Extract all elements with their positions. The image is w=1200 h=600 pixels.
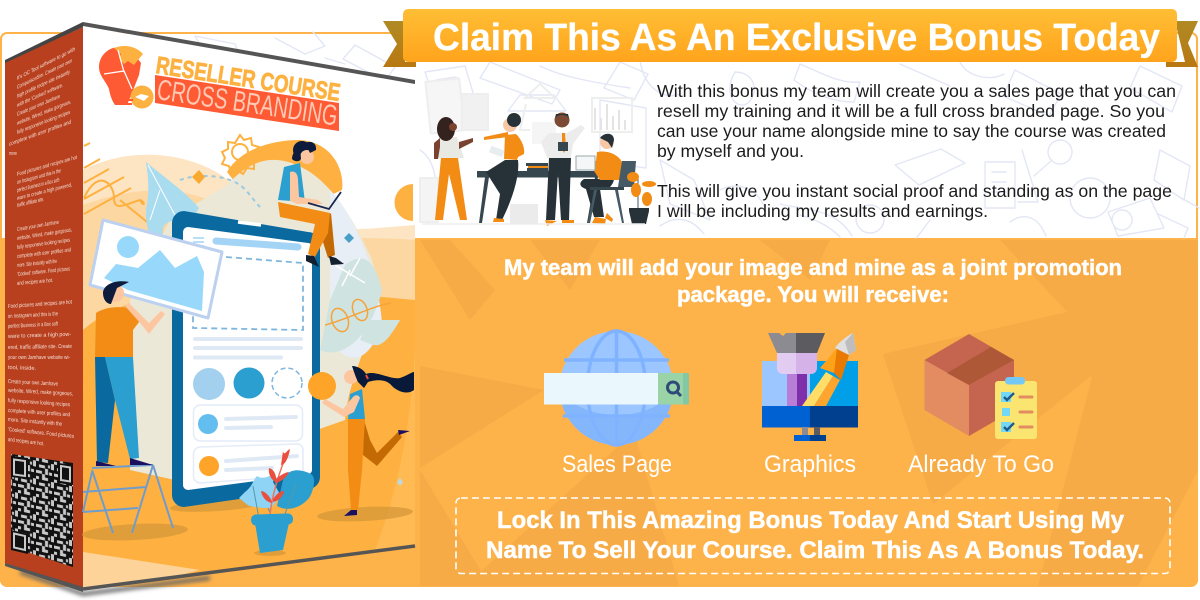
table	[477, 163, 605, 223]
icon: parcel box with checklist	[924, 334, 1037, 439]
QR code	[11, 454, 73, 567]
side panel text: website, Wired, make gorgeous,	[16, 227, 72, 242]
text block: bonus description: With this bonus my team will create you a sales page that you can	[657, 81, 1176, 101]
side panel text: on Instagram and this is the	[8, 311, 58, 320]
picture card held by man	[90, 220, 222, 318]
side panel text: Food pictures and recipes are hot	[17, 155, 77, 178]
side panel text: more	[9, 151, 17, 157]
side panel text: ware to create a high powered,	[16, 182, 72, 202]
front background waves	[83, 140, 415, 600]
side panel text: It's OC Tool software to go with	[17, 47, 75, 82]
side panel text: complete with user profiles and	[17, 247, 71, 260]
icon labels: Sales Page	[562, 451, 672, 478]
phone mockup	[172, 211, 320, 507]
text block: bonus description: This will give you instant social proof and standing as on the page	[657, 181, 1172, 201]
text block: bonus description: can use your name alongside mine to say the course was created	[657, 121, 1166, 141]
side panel text: perfect Business in a Box soft-	[17, 177, 60, 194]
box shadow	[20, 572, 210, 594]
side panel text: with the 'Cooked' software.	[16, 83, 63, 109]
side panel text: ered, traffic affiliate site. Create	[8, 344, 72, 351]
ground shadows	[82, 496, 413, 556]
side panel text: more. Site instantly with the	[8, 417, 62, 428]
grey office backdrop	[420, 78, 632, 224]
woman with ball	[308, 366, 414, 516]
side panel text: ComparisonSim. Create your own	[17, 58, 72, 91]
heading: you will receive	[504, 255, 1122, 307]
chair	[588, 161, 636, 223]
side panel text: Create your own Jamhave	[17, 94, 60, 118]
side panel text: your own Jamhave website wi-	[8, 355, 70, 361]
large beige blobs	[227, 140, 342, 194]
person: man standing with tie	[541, 112, 585, 226]
text block: bonus description: I will be including my results and earnings.	[657, 201, 988, 221]
side panel text	[7, 47, 77, 447]
box side panel	[5, 22, 83, 592]
side panel text: and recipes are hot.	[17, 278, 53, 287]
ribbon tails	[383, 21, 1198, 67]
icon: globe with search bar	[544, 331, 689, 445]
text block: bonus description: by myself and you.	[657, 141, 804, 161]
logo wordmark	[154, 52, 342, 133]
side panel text: complete with user profiles and	[9, 120, 71, 148]
side panel text: high profile recipe site instantly	[17, 69, 70, 100]
plant	[627, 172, 656, 224]
logo wordmark: RESELLER COURSE	[154, 52, 342, 107]
title banner ribbon	[383, 9, 1198, 67]
callout: lock in this bonus: Name To Sell Your Course. Claim This As A Bonus Today.	[486, 537, 1144, 564]
side panel text: website, Wired, make gorgeous,	[16, 99, 71, 127]
callout: lock in this bonus	[456, 498, 1170, 574]
decor: stripes, gear, diamonds	[84, 135, 260, 226]
decor: orange leaf sprig	[325, 258, 391, 334]
icon labels	[562, 451, 1054, 478]
side panel text: perfect Business in a Box soft	[8, 321, 58, 330]
side panel text: Create your own Jamhave	[17, 220, 59, 233]
text block: bonus description: resell my training and it will be a full cross branded page. So you	[657, 101, 1165, 121]
icon labels: Already To Go	[908, 451, 1054, 478]
side panel text: ware to create a high pow-	[7, 332, 71, 340]
seated person with laptop	[278, 141, 344, 267]
icon: graphics monitor with brushes	[762, 333, 858, 441]
side panel text: Food pictures and recipes are hot	[8, 300, 72, 310]
logo: puzzle bulb	[99, 46, 154, 108]
product box	[5, 22, 415, 600]
potted plant	[239, 449, 314, 553]
side panel text: 'Cooked' software. Food pictures	[8, 427, 74, 440]
heading: you will receive: package. You will receive:	[677, 282, 949, 307]
side panel text: complete with user profiles and	[8, 408, 70, 418]
person: woman with coffee	[434, 117, 473, 220]
person: woman leaning	[484, 113, 524, 222]
callout: lock in this bonus: Lock In This Amazing Bonus Today And Start Using My	[497, 507, 1125, 534]
side panel text: website, Wired, make gorgeous,	[7, 388, 73, 397]
illustration: team around a table	[420, 78, 656, 226]
side panel text: fully responsive looking recipes	[8, 398, 70, 408]
icon labels: Graphics	[764, 451, 856, 478]
side panel text: on Instagram and this is the	[17, 168, 61, 186]
logo wordmark: CROSS BRANDING	[155, 74, 340, 133]
side panel text: more. Site instantly with the	[17, 259, 57, 269]
background: doodle pattern	[195, 32, 1199, 238]
man on ladder	[83, 281, 173, 533]
person: seated man	[576, 134, 623, 224]
side panel text: 'Cooked' software. Food pictures	[17, 266, 70, 278]
side panel text: fully responsive looking recipes	[17, 110, 70, 136]
side panel text: fully responsive looking recipes	[17, 238, 70, 251]
decor: pale leaves	[146, 162, 199, 254]
title: Claim This As An Exclusive Bonus Today	[433, 17, 1160, 59]
side panel text: Create your own Jamhave	[8, 379, 58, 388]
side panel text: traffic affiliate site.	[17, 197, 44, 209]
text block: bonus description	[657, 81, 1176, 221]
background: orange low-poly facets	[420, 240, 1198, 586]
side panel text: tool, inside.	[8, 365, 36, 372]
box front panel	[82, 22, 415, 600]
side panel text: and recipes are hot.	[8, 437, 44, 447]
heading: you will receive: My team will add your image and mine as a joint promotion	[504, 255, 1122, 280]
